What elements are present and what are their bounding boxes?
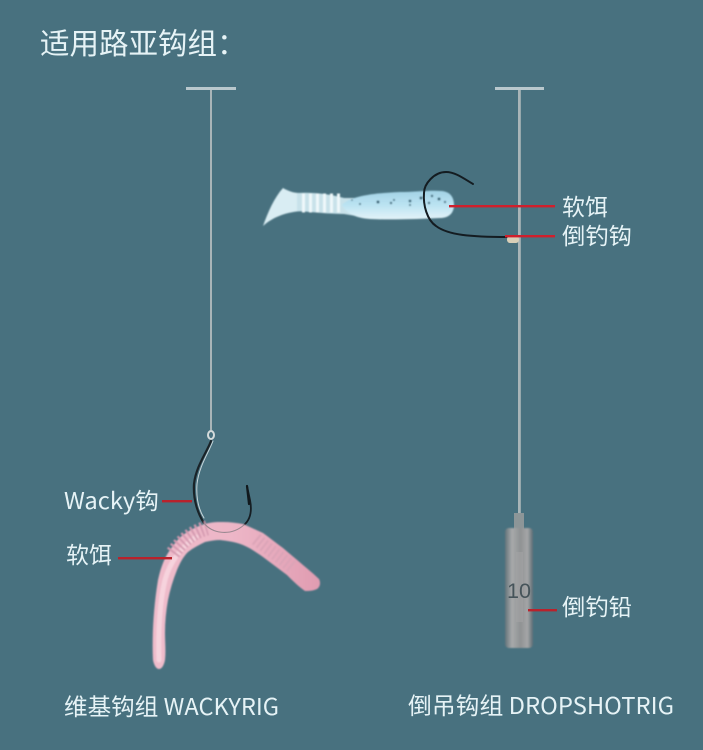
icon: hook eye — [208, 431, 214, 439]
label: soft bait right: 软饵 — [562, 188, 608, 222]
icon: offset hook — [424, 172, 508, 237]
label: sinker — [528, 588, 632, 622]
label: wacky hook: Wacky钩 — [64, 482, 159, 516]
title: 适用路亚钩组： — [40, 21, 247, 63]
icon: drop shot sinker — [505, 513, 533, 648]
icon: pink soft worm bait — [153, 522, 320, 669]
line: drop shot top bar and leader — [495, 87, 544, 514]
icon: soft fish bait — [263, 188, 454, 226]
panel: drop shot rig — [263, 87, 674, 721]
panel: wacky rig — [64, 87, 320, 722]
icon: wacky hook — [194, 441, 251, 525]
label: sinker: 倒钓铅 — [562, 588, 632, 622]
label: offset hook: 倒钓钩 — [562, 217, 632, 251]
icon: hook shank through worm — [204, 523, 244, 532]
caption: wacky rig: 维基钩组 WACKYRIG — [64, 688, 279, 722]
caption: drop shot rig: 倒吊钩组 DROPSHOTRIG — [408, 687, 674, 721]
label: soft bait left: 软饵 — [66, 536, 112, 570]
icon: hook knot — [507, 236, 519, 243]
label: offset hook — [505, 217, 632, 251]
icon: drop shot sinker: 10 — [507, 580, 531, 603]
line: wacky top bar and leader — [186, 87, 236, 430]
label: soft bait left — [66, 536, 172, 570]
